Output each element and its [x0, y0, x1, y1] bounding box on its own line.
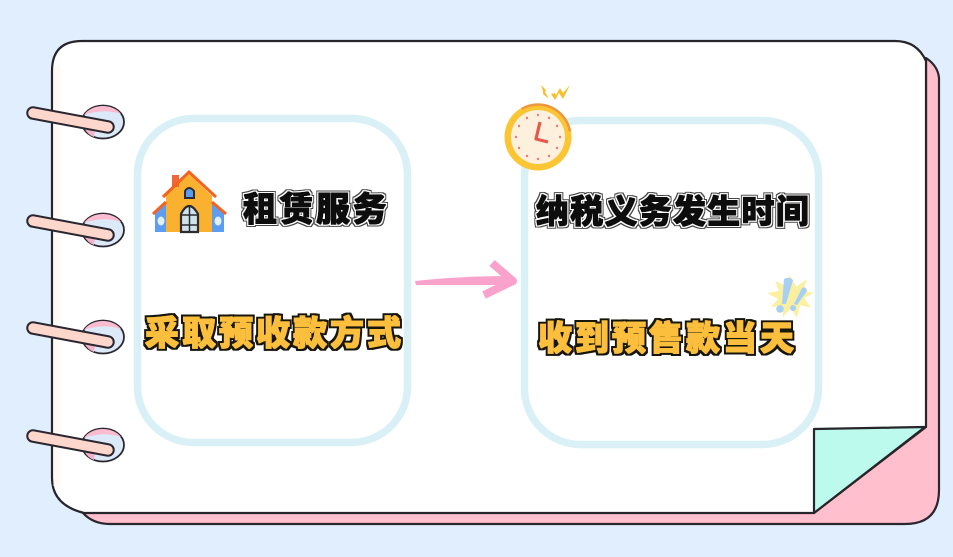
- folded corner: [814, 427, 925, 513]
- page edge tint: [54, 66, 60, 486]
- rings: [33, 106, 124, 462]
- ring 1: [33, 106, 124, 138]
- heading: tax obligation time: 纳税义务发生时间: [536, 193, 810, 230]
- panel: left box: [138, 118, 408, 442]
- text: advance payment method: 采取预收款方式: [145, 314, 404, 353]
- icon: clock: [504, 85, 572, 170]
- ring 3: [33, 320, 124, 354]
- icon: exclamation marks: [767, 275, 814, 318]
- panel: right box: [524, 120, 818, 444]
- icon: lightning: [541, 85, 570, 100]
- icon: house: [153, 172, 226, 232]
- ring 4: [33, 428, 124, 462]
- notebook front page: [52, 41, 926, 513]
- arrow: [415, 263, 514, 295]
- text: day of receiving pre-sale payment: 收到预售款当天: [538, 320, 797, 358]
- notebook back page: [83, 58, 939, 524]
- ring 2: [33, 214, 124, 246]
- heading: rental service: 租赁服务: [243, 191, 389, 229]
